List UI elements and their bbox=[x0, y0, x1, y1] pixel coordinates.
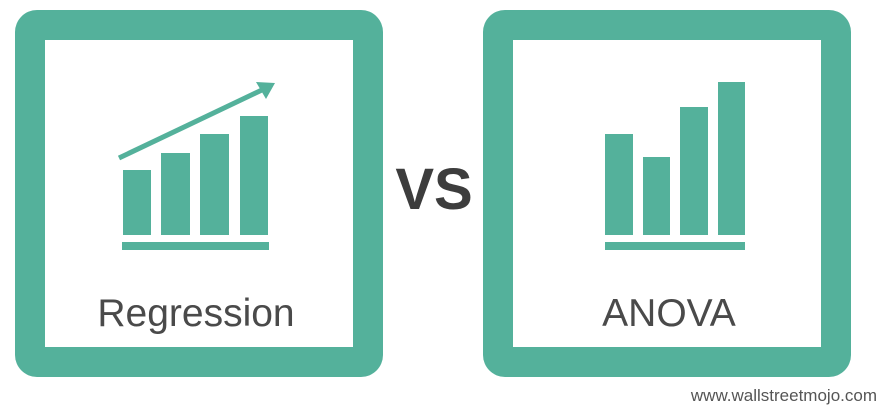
text: vs: VS bbox=[395, 157, 473, 222]
icon: anova chart bbox=[605, 82, 745, 250]
icon: regression chart bbox=[119, 82, 275, 250]
panel: anova bbox=[483, 10, 851, 377]
heading: Regression: Regression bbox=[97, 292, 295, 335]
heading: ANOVA: ANOVA bbox=[602, 292, 736, 335]
panel: regression bbox=[15, 10, 383, 377]
watermark: www.wallstreetmojo.com bbox=[690, 386, 877, 405]
